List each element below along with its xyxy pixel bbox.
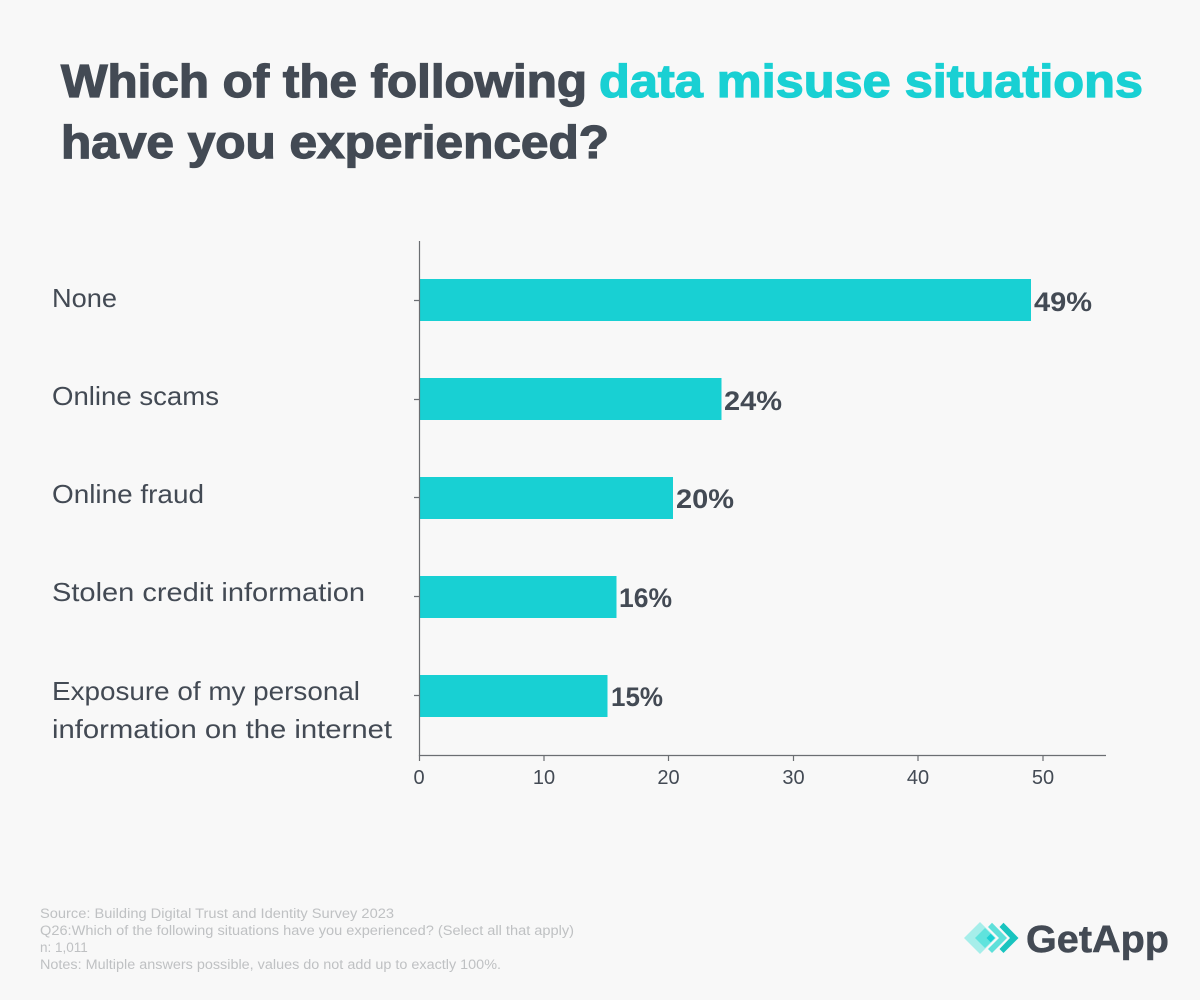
x axis labels: 20 xyxy=(657,767,680,789)
x axis labels: 10 xyxy=(533,767,555,789)
title: have you experienced? xyxy=(61,116,609,168)
value labels xyxy=(611,287,1092,712)
value labels: 15% xyxy=(611,682,663,712)
category labels: None xyxy=(52,283,117,313)
value labels: 49% xyxy=(1034,287,1092,317)
category labels: Online scams xyxy=(52,381,219,411)
value labels: 24% xyxy=(724,386,782,416)
source notes: n: 1,011 xyxy=(40,940,88,955)
axes xyxy=(414,241,1106,761)
icon: chevron diamonds xyxy=(964,922,1018,954)
source notes: Notes: Multiple answers possible, values do not add up to exactly 100%. xyxy=(40,957,501,972)
title: data misuse situations xyxy=(599,55,1143,107)
x axis labels xyxy=(413,767,1054,789)
category labels: Exposure of my personal xyxy=(52,676,360,706)
logo wordmark: GetApp xyxy=(1026,919,1169,961)
bar chart xyxy=(52,241,1106,789)
category labels: information on the internet xyxy=(52,714,393,744)
source notes: Source: Building Digital Trust and Identity Survey 2023 xyxy=(40,906,394,921)
value labels: 16% xyxy=(619,583,672,613)
source notes: Q26:Which of the following situations have you experienced? (Select all that apply) xyxy=(40,923,574,938)
category labels xyxy=(52,283,393,744)
logo: GetApp xyxy=(964,919,1169,961)
category labels: Online fraud xyxy=(52,479,204,509)
title xyxy=(61,55,1143,168)
x axis labels: 30 xyxy=(782,767,805,789)
x axis labels: 40 xyxy=(907,767,929,789)
title: Which of the following xyxy=(61,55,587,107)
source notes xyxy=(40,906,574,972)
bars xyxy=(420,279,1031,717)
value labels: 20% xyxy=(676,484,734,514)
x axis labels: 50 xyxy=(1032,767,1054,789)
x axis labels: 0 xyxy=(413,767,425,789)
category labels: Stolen credit information xyxy=(52,577,365,607)
